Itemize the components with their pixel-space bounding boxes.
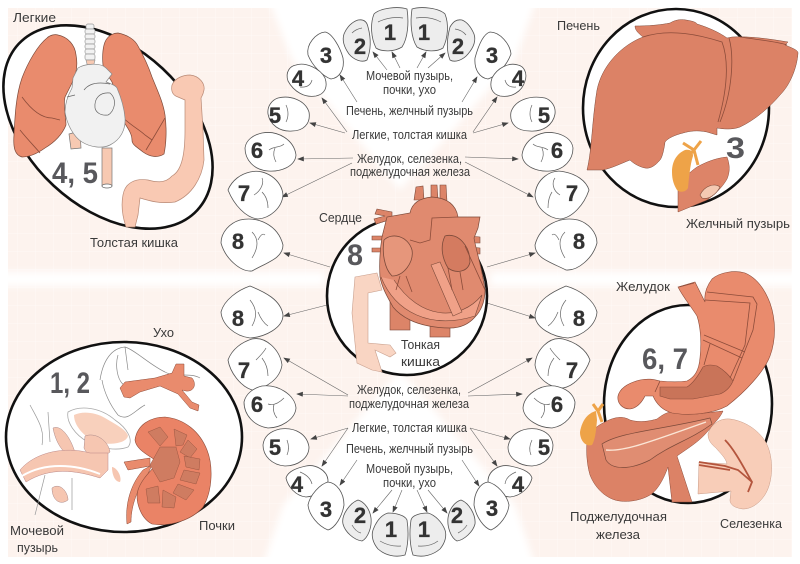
tooth upper left 1: [372, 8, 408, 51]
text block: upper organ list: Печень, желчный пузырь: [346, 103, 473, 118]
icon: heart: [380, 197, 485, 328]
tooth upper right 1: 1: [418, 20, 430, 45]
tooth upper right 7: 7: [566, 181, 578, 206]
stomach interior: [655, 283, 757, 399]
tooth lower right 7: [535, 339, 590, 388]
tooth upper right 5: 5: [538, 103, 550, 128]
label: spleen: Селезенка: [720, 516, 783, 531]
tooth lower left 6: 6: [251, 392, 263, 417]
label: liver: Печень: [557, 18, 600, 33]
icon: small intestine: [352, 273, 396, 372]
tooth lower left 8: 8: [232, 306, 244, 331]
tooth lower right 2: 2: [451, 503, 463, 528]
icon: duodenum detail: [700, 185, 720, 198]
tooth upper right 4: 4: [512, 66, 525, 91]
tooth upper left 4: 4: [292, 66, 305, 91]
number: 6, 7: 6, 7: [642, 343, 688, 376]
oval frame: [604, 305, 772, 503]
tooth upper right 6: 6: [551, 138, 563, 163]
tooth lower right 7: 7: [566, 358, 578, 383]
tooth upper left 2: [343, 20, 370, 61]
oval frame: [0, 0, 252, 269]
label: small intestine: кишка: [401, 354, 441, 369]
text block: lower organ list: Мочевой пузырь,: [366, 461, 453, 476]
text block: upper organ list: поджелудочная железа: [350, 164, 471, 179]
label: large intestine: Толстая кишка: [90, 235, 179, 250]
icon: heart: [65, 64, 125, 147]
upper teeth: [221, 8, 597, 271]
text block: lower organ list: Желудок, селезенка,: [357, 382, 461, 397]
icon: kidney: [135, 417, 211, 525]
tooth lower right 4: [488, 466, 532, 497]
oval frame: [6, 342, 242, 532]
tooth upper right 3: 3: [486, 43, 498, 68]
tooth upper right 4: [491, 64, 526, 96]
tooth upper left 6: 6: [251, 138, 263, 163]
tooth lower right 2: [448, 500, 475, 541]
pancreas duct: [602, 418, 712, 468]
tooth upper right 5: [511, 97, 555, 131]
text block: upper organ list: Легкие, толстая кишка: [352, 127, 468, 142]
text block: lower organ list: поджелудочная железа: [349, 396, 470, 411]
icon: vessels: [69, 131, 112, 188]
tooth upper right 1: [411, 8, 447, 51]
label: lungs: Легкие: [13, 10, 56, 25]
tooth upper right 3: [475, 32, 511, 79]
tooth upper right 7: [535, 171, 589, 219]
icon: liver: [587, 20, 798, 170]
label: pancreas: железа: [596, 527, 641, 542]
tooth lower left 4: 4: [291, 472, 304, 497]
tooth upper left 8: [221, 219, 283, 271]
label: gallbladder: Желчный пузырь: [686, 216, 790, 231]
tooth upper left 7: 7: [238, 181, 250, 206]
lung fissures: [20, 97, 165, 153]
tooth upper left 5: 5: [269, 103, 281, 128]
panel: bladder, ear and kidney: [6, 325, 242, 555]
tooth upper left 4: [287, 64, 326, 96]
tooth upper right 2: 2: [452, 34, 464, 59]
lower teeth: [221, 286, 597, 556]
arrows: heart links: [284, 253, 535, 318]
tooth lower right 6: [523, 386, 575, 428]
tooth lower right 5: [508, 429, 553, 466]
text block: lower organ list: Легкие, толстая кишка: [352, 420, 468, 435]
number: 1, 2: 1, 2: [50, 367, 90, 400]
circle frame: [583, 9, 769, 207]
tooth upper right 2: [447, 20, 475, 61]
label: ear: Ухо: [153, 325, 174, 340]
kidney pyramids: [146, 427, 200, 508]
tooth lower left 5: 5: [269, 435, 281, 460]
label: stomach: Желудок: [616, 279, 670, 294]
icon: right lung: [103, 33, 166, 156]
number: 3: 3: [726, 132, 745, 165]
tooth upper right 8: 8: [573, 229, 585, 254]
label: heart: Сердце: [319, 210, 362, 225]
tooth lower left 4: [286, 466, 328, 497]
icon: bladder: [74, 413, 128, 444]
tooth upper left 6: [245, 132, 296, 171]
tooth lower right 1: [410, 513, 446, 556]
icon: duodenum: [678, 157, 729, 212]
icon: inner ear: [120, 364, 199, 411]
tooth upper left 5: [268, 97, 309, 131]
text block: upper organ list: Желудок, селезенка,: [357, 151, 462, 166]
icon: gallbladder: [672, 141, 701, 192]
icon: prostate and urethra: [20, 405, 121, 515]
label: pancreas: Поджелудочная: [570, 509, 667, 524]
text block: upper organ list: Мочевой пузырь,: [366, 68, 453, 83]
tooth lower left 1: 1: [385, 517, 397, 542]
tooth lower right 8: [535, 286, 597, 338]
label: bladder: Мочевой: [10, 523, 64, 538]
text block: upper organ list: почки, ухо: [383, 82, 436, 97]
tooth lower right 3: 3: [486, 496, 498, 521]
panel: liver and gallbladder: [557, 9, 798, 231]
icon: large intestine: [122, 75, 204, 227]
text block: upper organ list: [346, 68, 473, 179]
heart chambers: [381, 217, 485, 321]
circle frame: [327, 217, 487, 375]
tooth lower right 6: 6: [551, 392, 563, 417]
label: small intestine: Тонкая: [401, 337, 440, 352]
icon: pancreas: [587, 411, 723, 502]
tooth upper left 1: 1: [384, 20, 396, 45]
panel: heart and small intestine: [319, 185, 487, 375]
tooth lower right 5: 5: [538, 435, 550, 460]
arrows: upper organ links: [282, 52, 533, 197]
number: 8: 8: [347, 239, 363, 272]
tooth lower left 7: [228, 339, 282, 390]
tooth lower right 8: 8: [573, 306, 585, 331]
liver lines: [643, 33, 787, 122]
tooth lower left 6: [244, 386, 296, 428]
text block: lower organ list: Печень, желчный пузырь: [346, 441, 473, 456]
spleen vessels: [699, 440, 752, 492]
icon: left lung: [14, 35, 77, 157]
tooth lower left 3: 3: [320, 497, 332, 522]
icon: bladder outline: [68, 408, 130, 449]
icon: spleen: [698, 419, 772, 509]
tooth upper right 8: [535, 219, 597, 270]
icon: stomach: [618, 272, 774, 414]
icon: heart vessels: [372, 185, 480, 337]
number: 4, 5: 4, 5: [52, 157, 98, 190]
tooth upper left 2: 2: [354, 34, 366, 59]
tooth lower right 3: [474, 482, 509, 530]
text block: lower organ list: почки, ухо: [383, 475, 436, 490]
tooth lower right 4: 4: [512, 472, 525, 497]
tooth upper right 6: [522, 132, 573, 171]
tooth lower left 2: 2: [354, 503, 366, 528]
tooth lower left 8: [221, 286, 283, 338]
tooth lower left 7: 7: [238, 358, 250, 383]
arrows: lower organ links: [284, 358, 532, 513]
icon: trachea: [85, 24, 95, 68]
tooth lower left 2: [343, 500, 371, 541]
label: bladder: пузырь: [17, 540, 58, 555]
tooth upper left 8: 8: [232, 229, 244, 254]
icon: outer ear: [100, 347, 200, 417]
tooth upper left 3: 3: [320, 43, 332, 68]
text block: lower organ list: [346, 382, 473, 490]
icon: gallbladder: [580, 404, 603, 445]
panel: stomach, pancreas and spleen: [570, 272, 783, 542]
tooth upper left 7: [228, 171, 283, 219]
tooth lower right 1: 1: [418, 517, 430, 542]
icon: ureter: [124, 458, 152, 524]
tooth lower left 3: [308, 482, 344, 530]
label: kidneys: Почки: [199, 518, 235, 533]
panel: lungs and large intestine: [0, 0, 252, 269]
tooth lower left 1: [372, 513, 408, 556]
tooth upper left 3: [308, 32, 343, 79]
tooth lower left 5: [263, 429, 309, 466]
